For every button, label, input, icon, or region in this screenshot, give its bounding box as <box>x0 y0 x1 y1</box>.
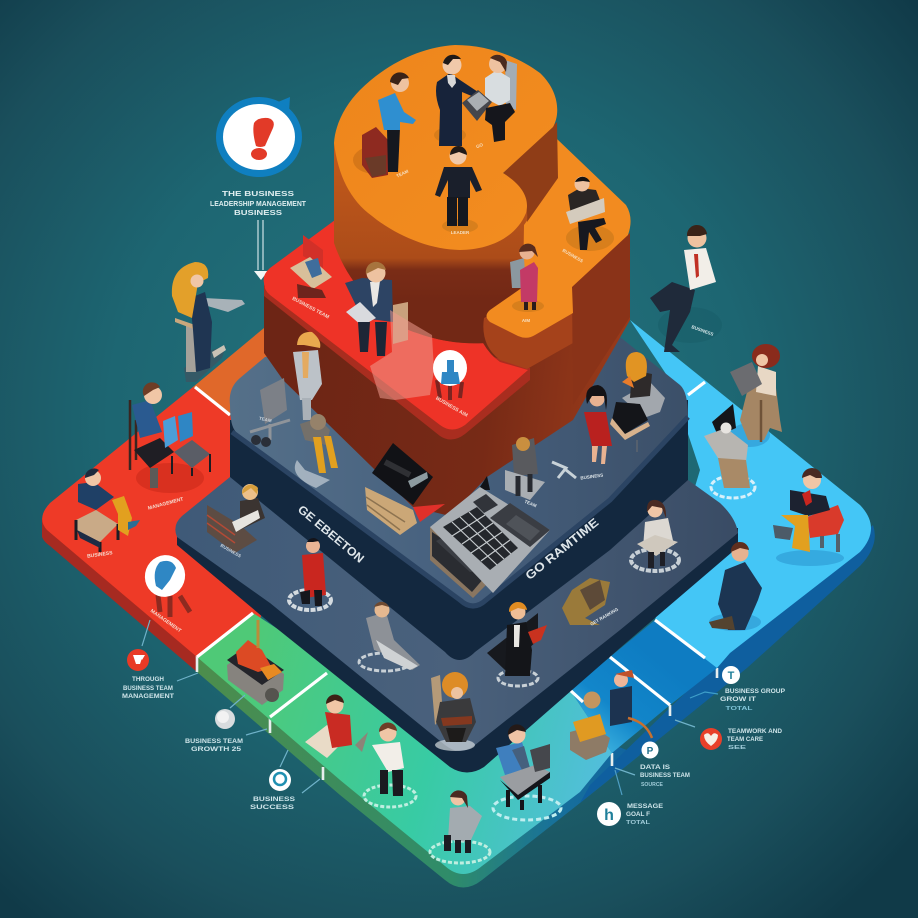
callout: red icon left <box>122 620 198 700</box>
pale red splash <box>370 310 434 400</box>
figure: man with red chair <box>773 468 844 566</box>
callout heading text <box>210 189 306 217</box>
callout: P icon: SOURCE <box>641 782 664 788</box>
callout: red icon left: MANAGEMENT <box>122 694 174 700</box>
callout: white ball: GROWTH 25 <box>191 747 242 753</box>
callout: heart icon <box>675 720 783 751</box>
callout: ring icon <box>250 750 320 811</box>
callout: T icon right: GROW IT <box>720 697 756 703</box>
figure: man with papers on red tier <box>345 262 408 356</box>
figure: man at blue book on red panel: MANAGEMENT <box>147 496 184 512</box>
figure: orange-haired person at front of navy <box>431 672 476 751</box>
orange tier small labels: LEADER <box>451 230 470 235</box>
figure: dark suit man <box>434 55 478 146</box>
figure: woman in pink: AIM <box>522 318 530 323</box>
figure: seated man at tan table <box>76 468 140 560</box>
figure: gray man with chair on navy: TEAM <box>524 499 538 508</box>
figure: white shirt man on green <box>364 722 416 807</box>
figure: gray man with black screen <box>704 404 755 498</box>
icon: laptop <box>430 476 550 598</box>
icon: white and blue badge on red panel: MANAGEMENT <box>149 608 182 634</box>
figure: woman in red dress: BUSINESS <box>580 472 604 481</box>
main side wall <box>334 143 530 343</box>
callout: white ball: BUSINESS TEAM <box>185 739 243 745</box>
figure: orange-haired woman with laptop <box>610 352 665 452</box>
figure: gold statue on navy: GET RANKING <box>589 606 620 627</box>
icon: white and blue badge on red panel <box>139 549 191 634</box>
callout: T icon right <box>690 666 785 712</box>
figure: gray woman with cloak on navy <box>359 602 420 671</box>
callout: red icon left: THROUGH <box>132 677 164 683</box>
band label right: GO RAMTIME <box>523 515 601 583</box>
lobe top surface <box>486 139 631 338</box>
callout: T icon right: BUSINESS GROUP <box>725 689 785 695</box>
callout: h icon <box>597 770 663 826</box>
icon: grill <box>227 620 284 705</box>
figure: seated man at tan table: BUSINESS <box>87 550 114 560</box>
callout: red icon left: BUSINESS TEAM <box>123 686 173 692</box>
callout: T icon right: TOTAL <box>726 706 752 712</box>
callout: T icon right: T <box>728 670 735 682</box>
lobe side wall <box>483 285 573 369</box>
panel: red tier body <box>264 220 630 516</box>
figure: man at blue book on red panel <box>130 382 210 512</box>
callout: heart icon: TEAM CARE <box>727 737 763 743</box>
ring label: BUSINESS TEAM <box>291 296 330 320</box>
callout: P icon: P <box>647 746 654 757</box>
callout: white ball <box>185 695 267 753</box>
figure: gold statue on navy <box>562 578 620 627</box>
panel: light blue base segment <box>630 320 871 668</box>
base dividers <box>195 382 705 717</box>
figure: woman on box <box>570 692 610 760</box>
figure: seated woman with tablet <box>462 55 517 142</box>
callout: h icon: MESSAGE <box>627 804 663 810</box>
icon: black box on books <box>365 443 445 535</box>
panel: upper navy tier <box>230 337 688 660</box>
figure: centre suited man <box>435 146 482 233</box>
base platform side <box>42 518 875 888</box>
callout: exclamation bubble <box>216 97 302 177</box>
figure: red coat man on navy <box>289 538 331 610</box>
figure: navy robed man <box>709 542 762 631</box>
callout heading text: LEADERSHIP MANAGEMENT <box>210 199 306 208</box>
callout: heart icon: SEE <box>728 745 747 751</box>
figure: man in white shirt: BUSINESS <box>691 324 714 337</box>
callout: ring icon: BUSINESS <box>253 797 295 803</box>
figure: woman in pale jacket <box>293 332 322 420</box>
figure: gray man with chair on navy <box>505 437 576 508</box>
orange tier small labels: TEAM <box>396 169 409 179</box>
callout: h icon: TOTAL <box>626 820 650 826</box>
main top surface <box>334 45 557 250</box>
panel: orange tier <box>334 45 631 405</box>
panel: dark blue base segments <box>570 620 717 753</box>
figure: seated reader on lobe <box>562 176 614 264</box>
figure: seated reader on lobe: BUSINESS <box>562 248 584 264</box>
figure: man in white shirt <box>650 225 722 352</box>
figure: woman in red dress <box>580 385 612 481</box>
figure: blue shirt man <box>353 72 416 178</box>
figure: red desk with monitor <box>290 235 332 320</box>
callout: P icon: BUSINESS TEAM <box>640 773 690 779</box>
panel: green and cyan base segment <box>197 613 612 874</box>
orange tier small labels: GO <box>475 142 484 149</box>
panel: orange base segment <box>193 328 300 417</box>
callout: h icon: GOAL F <box>626 812 650 818</box>
callout: h icon: h <box>604 807 614 824</box>
figure: red jacket man on green <box>305 694 368 758</box>
band label left: GE EBEETON <box>295 502 367 566</box>
figure: pale seated figure with tan jacket on right panel <box>730 344 782 447</box>
arrow: down to red tier <box>254 220 268 280</box>
figure: black suit man with orange hair <box>487 602 547 686</box>
callout: P icon: DATA IS <box>640 765 670 771</box>
figure: seated man with red hair <box>610 670 652 738</box>
callout: P icon <box>615 742 690 788</box>
icon: white and blue badge on red tier <box>433 350 469 419</box>
figure: blonde presenter <box>172 262 245 382</box>
panel: red base segment <box>42 387 300 657</box>
callout heading text: BUSINESS <box>234 208 282 217</box>
figure: office chair in slate <box>250 378 290 447</box>
figure: man with yellow trousers <box>295 414 338 488</box>
figure: woman in pink <box>510 244 544 323</box>
orange tier small labels <box>396 142 484 235</box>
figure: man at laptop desk <box>493 724 561 820</box>
panel: lower navy tier <box>175 477 738 772</box>
callout heading text: THE BUSINESS <box>222 189 294 198</box>
callout: ring icon: SUCCESS <box>250 805 294 811</box>
figure: woman with books on navy <box>207 484 265 559</box>
figure: woman at the tip <box>430 790 490 863</box>
callout: heart icon: TEAMWORK AND <box>728 729 783 735</box>
figure: woman with books on navy: BUSINESS <box>220 543 242 559</box>
right side wall <box>572 233 630 405</box>
icon: white and blue badge on red tier: BUSINESS AIM <box>434 396 469 419</box>
main wedge side <box>503 122 558 222</box>
figure: woman with white blouse on navy <box>631 500 679 571</box>
figure: office chair in slate: TEAM <box>259 416 272 423</box>
